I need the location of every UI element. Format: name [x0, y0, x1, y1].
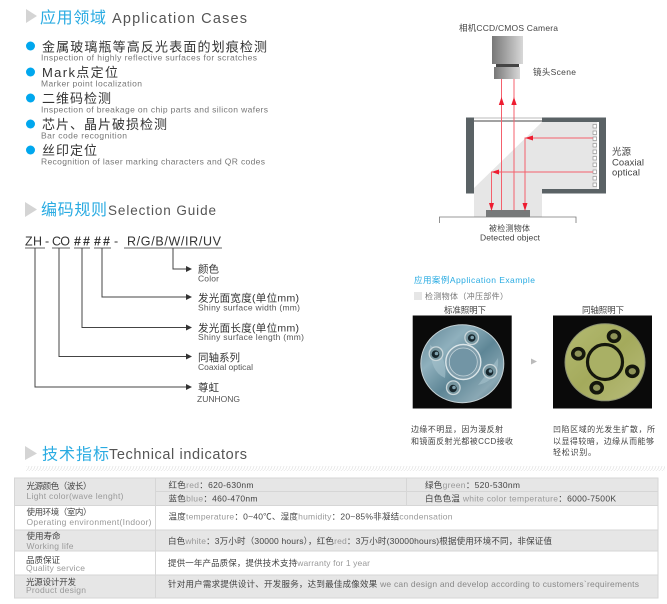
- light source label: optical: [612, 168, 640, 178]
- right explanation: 以显得较暗，边缘从而能够: [553, 436, 654, 446]
- left explanation: 边缘不明显，因为漫反射: [411, 424, 503, 434]
- arrow between photos: [531, 358, 537, 364]
- list item: scratches: 金属玻璃瓶等高反光表面的划痕检测: [42, 40, 267, 54]
- light housing: [466, 118, 606, 217]
- row: working life: [26, 531, 552, 551]
- row: product design: [26, 577, 639, 595]
- caption: coaxial lighting: 同轴照明下: [582, 305, 624, 315]
- row: light color: 白色色温 white color temperature：6000-7500K: [425, 494, 616, 504]
- label: length: [198, 322, 304, 342]
- row: light color: 红色red：620-630nm: [168, 480, 254, 490]
- row: product design: 针对用户需求提供设计、开发服务，达到最佳成像效果 we can design and develop according to customers`requirements: [168, 579, 639, 589]
- row: light color: [26, 480, 616, 504]
- list item: silk print: [26, 143, 265, 166]
- label: coaxial: [198, 351, 253, 372]
- heading: selection guide: Selection Guide: [108, 203, 216, 218]
- list item: mark point: Mark点定位: [42, 65, 118, 80]
- row: light color: 蓝色blue：460-470nm: [168, 494, 258, 504]
- label: color: 颜色: [198, 262, 220, 276]
- model code: -: [114, 234, 118, 248]
- light source label: [612, 146, 644, 178]
- icon: camera and lens: [492, 36, 523, 79]
- label: width: Shiny surface width (mm): [198, 302, 300, 312]
- list item: mark point: Marker point localization: [41, 78, 142, 88]
- model code: -: [45, 234, 49, 248]
- label: length: Shiny surface length (mm): [198, 332, 304, 342]
- left explanation: 和镜面反射光都被CCD接收: [411, 436, 513, 446]
- photo: coaxial lighting: [553, 316, 652, 408]
- model code: [25, 234, 222, 248]
- row: quality: 提供一年产品质保，提供技术支持warranty for 1 year: [168, 558, 370, 568]
- example heading: 应用案例Application Example: [414, 275, 535, 285]
- table row backgrounds: [14, 478, 658, 598]
- label: color: Color: [198, 274, 219, 284]
- row: quality: Quality service: [26, 563, 85, 573]
- row: working life: 使用寿命: [26, 531, 61, 541]
- table grid: [14, 478, 658, 598]
- model code: R/G/B/W/IR/UV: [127, 234, 222, 248]
- row: environment: 使用环境（室内）: [26, 507, 92, 517]
- left explanation: [411, 424, 513, 446]
- list item: scratches: [26, 40, 267, 62]
- label: coaxial: 同轴系列: [198, 351, 240, 364]
- row: light color: Light color(wave lenght): [26, 491, 124, 501]
- lens label: 镜头Scene: [533, 67, 576, 77]
- section: selection guide: [25, 201, 304, 404]
- model code: ZH: [25, 234, 42, 248]
- detected object: [440, 210, 576, 223]
- list item: silk print: Recognition of laser marking characters and QR codes: [41, 156, 265, 166]
- optical diagram: [440, 23, 644, 242]
- heading: selection guide: [25, 201, 216, 219]
- row: product design: Product design: [26, 585, 86, 595]
- list item: QR code: 二维码检测: [42, 91, 111, 106]
- right explanation: [553, 424, 655, 457]
- photo: standard lighting: [413, 316, 512, 408]
- light source label: Coaxial: [612, 158, 644, 168]
- model code: ##: [94, 234, 110, 248]
- heading: technical indicators: [25, 446, 247, 464]
- right explanation: 凹陷区域的光发生扩散，所: [553, 424, 655, 434]
- object label: [480, 223, 541, 242]
- list item: chip breakage: 芯片、晶片破损检测: [42, 117, 167, 132]
- list item: chip breakage: [26, 117, 167, 140]
- row: light color: 光源颜色（波长）: [26, 481, 92, 491]
- label: brand: 尊虹: [198, 381, 220, 394]
- row: working life: 白色white：3万小时（30000 hours），红色red：3万小时(30000hours)根据使用环境不同，非保证值: [168, 536, 552, 546]
- heading: application cases: Application Cases: [112, 11, 247, 27]
- code underlines: [25, 247, 222, 249]
- camera label: 相机CCD/CMOS Camera: [459, 23, 558, 33]
- label: length: 发光面长度(单位mm): [198, 322, 299, 334]
- model code: ##: [74, 234, 90, 248]
- list item: silk print: 丝印定位: [42, 143, 97, 158]
- label: brand: [197, 381, 240, 404]
- row: light color: 绿色green：520-530nm: [425, 480, 520, 490]
- label: coaxial: Coaxial optical: [198, 362, 253, 372]
- row: product design: 光源设计开发: [26, 577, 76, 587]
- heading: technical indicators: 技术指标: [42, 446, 109, 464]
- row: environment: 温度temperature：0~40℃、湿度humidity：20~85%非凝结condensation: [168, 512, 453, 522]
- hatched divider: [26, 466, 665, 471]
- row: quality: [26, 555, 370, 573]
- specification table: [14, 478, 658, 598]
- label: brand: ZUNHONG: [197, 394, 240, 404]
- light source label: 光源: [612, 146, 632, 158]
- row: quality: 品质保证: [26, 555, 60, 565]
- section: application cases: [26, 8, 268, 166]
- list item: QR code: [26, 91, 268, 114]
- list item: mark point: [26, 65, 142, 88]
- list item: scratches: Inspection of highly reflective surfaces for scratches: [41, 52, 257, 62]
- connector arrows: [35, 248, 192, 390]
- label: width: 发光面宽度(单位mm): [198, 292, 299, 304]
- row: environment: [26, 507, 453, 527]
- section: technical indicators: [14, 446, 665, 598]
- model code: CO: [52, 234, 70, 248]
- list item: chip breakage: Bar code recognition: [41, 130, 127, 140]
- caption: standard lighting: 标准照明下: [444, 305, 486, 315]
- application example: [411, 275, 655, 457]
- row: environment: Operating environment(Indoor): [26, 517, 152, 527]
- heading: technical indicators: Technical indicators: [109, 447, 247, 463]
- heading: selection guide: 编码规则: [41, 201, 107, 219]
- heading: application cases: 应用领域: [40, 8, 106, 27]
- object label: 被检测物体: [489, 223, 530, 233]
- light rays: [489, 79, 593, 211]
- LED strip: [593, 124, 596, 186]
- heading: application cases: [26, 8, 247, 27]
- object label: Detected object: [480, 232, 541, 242]
- list item: QR code: Inspection of breakage on chip parts and silicon wafers: [41, 104, 268, 114]
- detected item label: 检测物体（冲压部件）: [425, 291, 508, 301]
- right explanation: 轻松识别。: [553, 447, 596, 457]
- row: working life: Working life: [26, 541, 74, 551]
- label: width: [198, 292, 300, 312]
- label: color: [198, 262, 220, 284]
